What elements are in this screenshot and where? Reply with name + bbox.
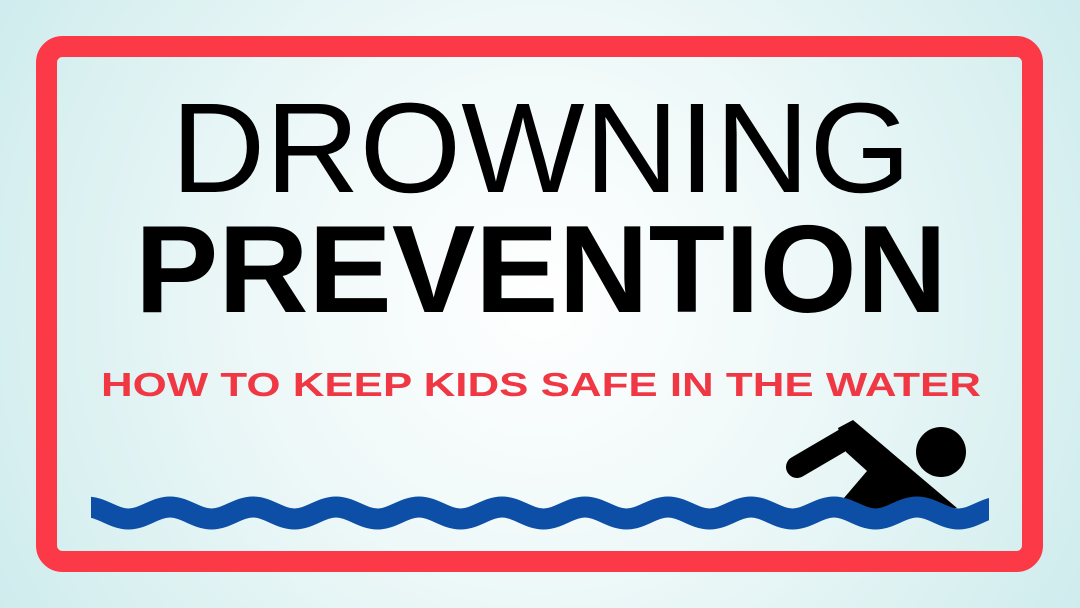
- icon: swimmer: [797, 420, 966, 512]
- subtitle: HOW TO KEEP KIDS SAFE IN THE WATER: [101, 366, 981, 403]
- title: DROWNING: DROWNING: [171, 77, 911, 220]
- title: PREVENTION: PREVENTION: [135, 201, 947, 339]
- wave: [87, 507, 1000, 519]
- sign border: [46, 46, 1032, 562]
